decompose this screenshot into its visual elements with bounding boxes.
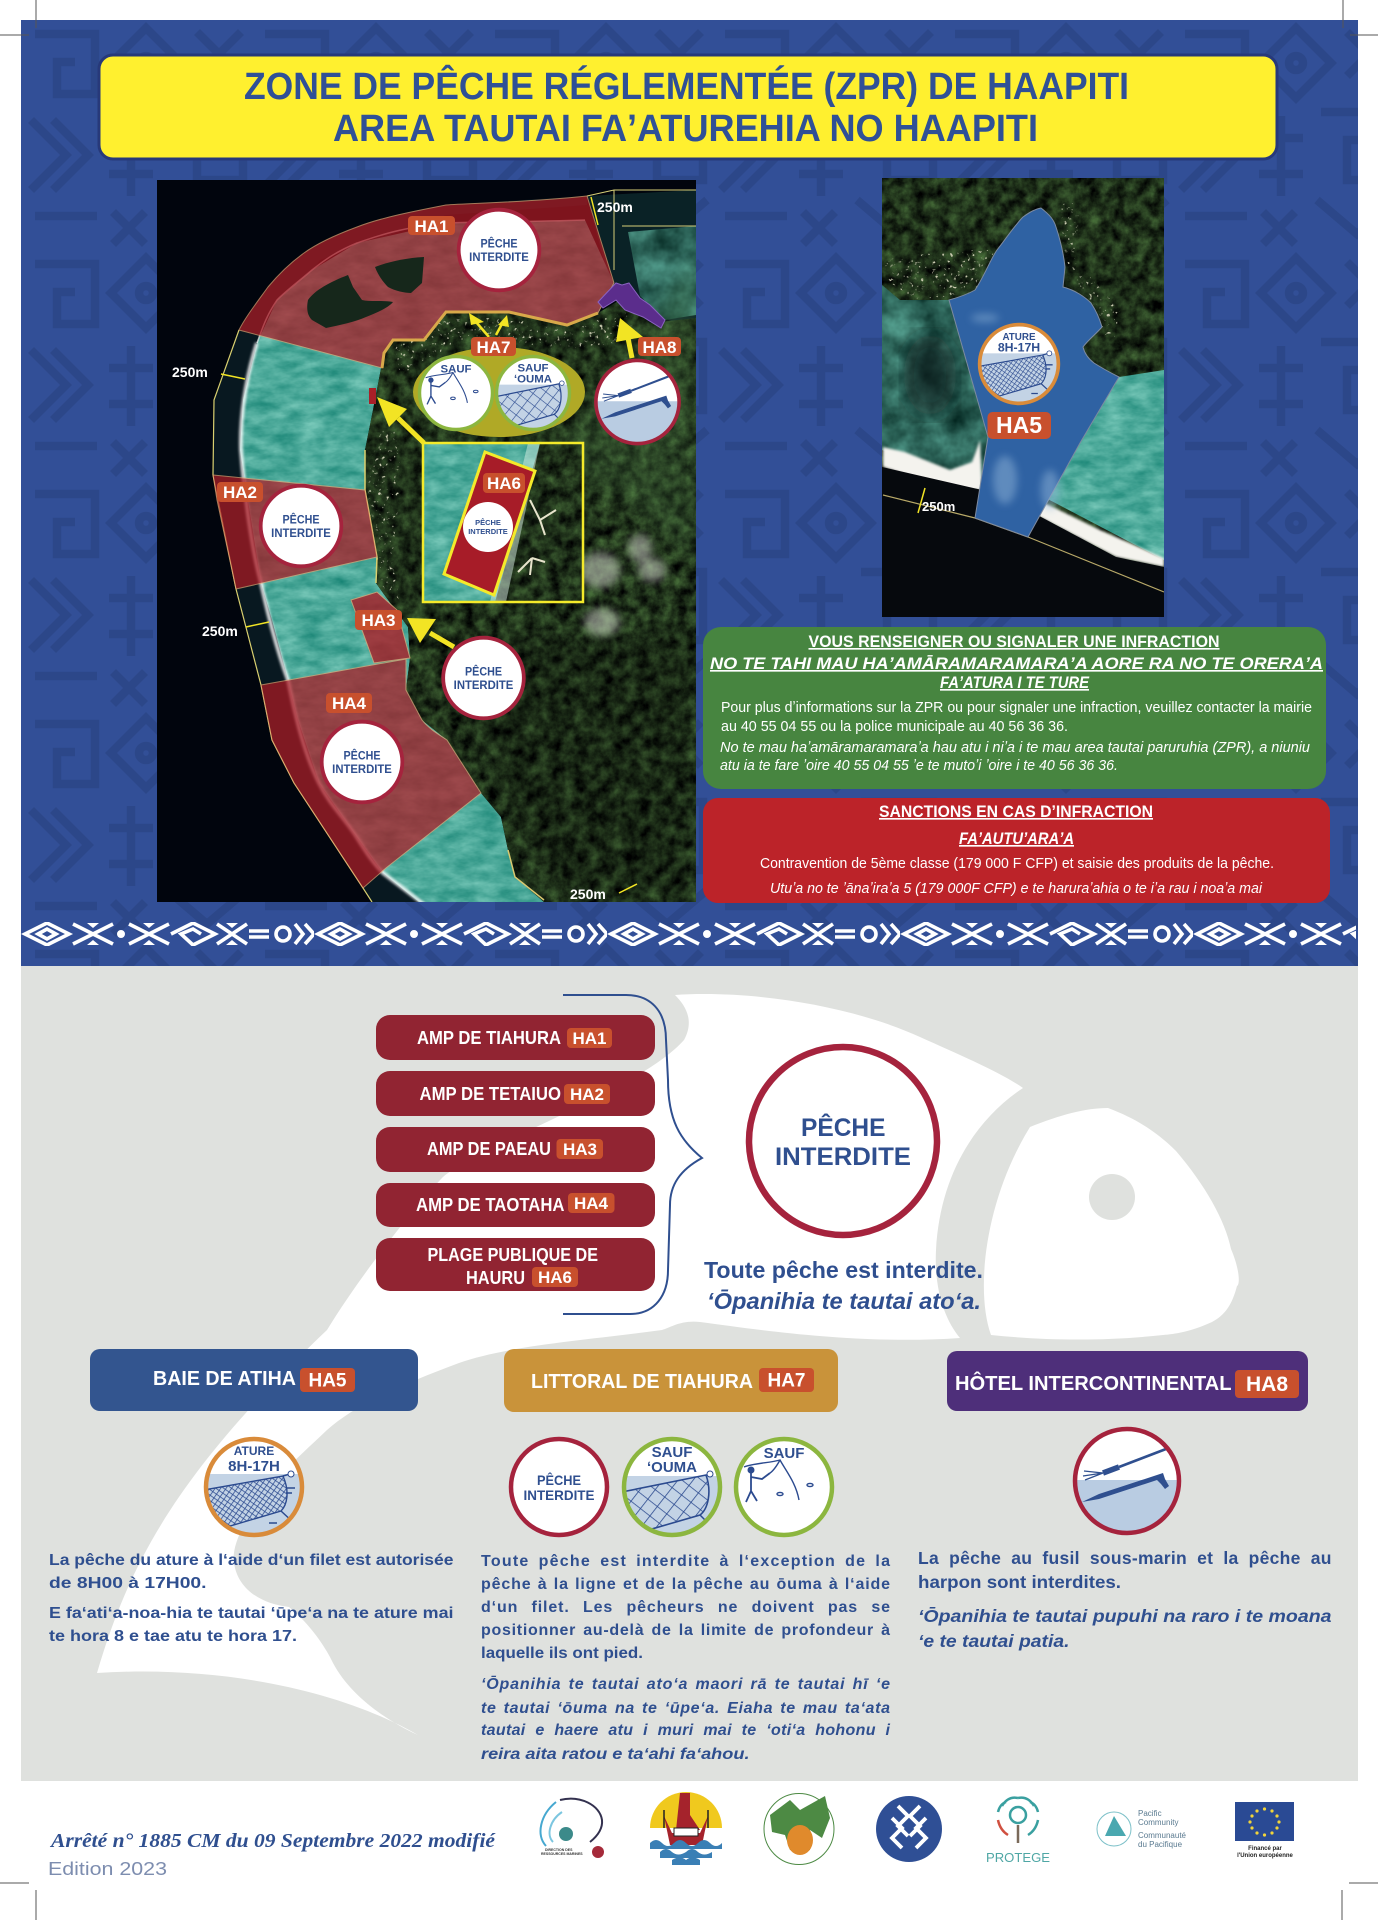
text: HA8 description: ʻe te tautai patia. [918,1631,1070,1651]
icon: ature 8H-17H: 8H-17H [228,1458,280,1475]
logo: PROTEGE: PROTEGE [986,1850,1050,1865]
logo: Union européenne: l'Union européenne [1237,1853,1294,1859]
icon: pêche interdite: INTERDITE [524,1487,594,1503]
list: AMP de Paeau: AMP DE PAEAU [427,1139,551,1159]
logo: direction des ressources marines: DIRECTION DES [545,1848,573,1852]
title banner [99,55,1277,159]
icon: big pêche interdite circle [749,1047,937,1235]
zone: HA3 [351,592,410,663]
label: HA1: HA1 [414,217,449,236]
header: Hôtel Intercontinental: HÔTEL INTERCONTINENTAL [955,1371,1232,1395]
panel: vous renseigner (green): NO TE TAHI MAU HAʼAMĀRAMARAMARAʼA AORE RA NO TE ORERAʼA [710,654,1323,673]
label: HA7: HA7 [476,338,511,357]
icon: pêche interdite HA4: PÊCHE [344,749,381,762]
panel: sanctions (red) [703,798,1330,903]
label: HA5 large [988,412,1051,439]
label: HA1 [408,216,455,236]
distance markers: 250m: 250m [597,199,633,215]
arrow: to HA8 [616,318,643,358]
logo: blue circle pattern [876,1796,942,1862]
list: Plage publique de Hauru: HAURU [466,1268,525,1288]
icon: ature 8H-17H [978,325,1060,407]
list: Plage publique de Hauru [376,1238,655,1291]
logo: Union européenne [1235,1802,1294,1859]
list: AMP de Tiahura: HA1 [572,1029,607,1048]
text: HA5 description: E faʻatiʻa-noa-hia te tautai ʻūpeʻa na te ature mai [49,1605,454,1622]
text: HA7 description: laquelle ils ont pied. [481,1645,643,1662]
icon: pêche interdite HA2 [261,486,341,566]
illustration: white fish silhouette [97,994,1239,1735]
header: Littoral de Tiahura: LITTORAL DE TIAHURA [531,1371,753,1393]
inset: HA6: INTERDITE [468,527,508,536]
zone: HA5 [949,208,1119,537]
text: toute pêche est interdite: ʻŌpanihia te tautai atoʻa. [707,1288,981,1314]
list: AMP de Tiahura: AMP DE TIAHURA [417,1028,561,1048]
text: HA7 description: pêche à la ligne et de la pêche au ōuma à lʻaide [481,1576,890,1593]
header: Baie de Atiha: BAIE DE ATIHA [153,1368,296,1390]
icon: pêche interdite HA4: INTERDITE [332,763,392,776]
distance markers: 250m: 250m [570,886,606,902]
icon: pêche interdite HA3: INTERDITE [454,679,513,692]
list: AMP de Tetaiuo [376,1071,655,1116]
icon: pêche interdite: PÊCHE [537,1471,581,1488]
text: HA8 description [918,1548,1332,1651]
icon: fusil sous-marin et harpon [1075,1429,1179,1533]
text: HA7 description: Toute pêche est interdite à lʻexception de la [481,1553,890,1570]
text: HA8 description: La pêche au fusil sous-marin et la pêche au [918,1548,1332,1568]
list: AMP de Taotaha [376,1183,655,1227]
list: AMP de Taotaha: AMP DE TAOTAHA [416,1195,564,1215]
brace [563,995,702,1314]
zone: HA2 [213,475,377,589]
distance marker: 250m [918,488,955,514]
panel: vous renseigner (green) [703,627,1326,789]
distance marker: 250m: 250m [922,499,955,514]
label: HA8: HA8 [642,338,677,357]
icon: sauf: SAUF [764,1445,804,1462]
zone: HA4 [261,659,481,888]
panel: vous renseigner (green): atu ia te fare ʼoire 40 55 04 55 ʼe te mutoʼi ʼoire i te 40 56 36 36. [720,757,1118,774]
icon: ature 8H-17H: 8H-17H [998,341,1040,355]
label: HA3: HA3 [361,611,396,630]
header: Littoral de Tiahura: HA7 [767,1370,806,1392]
label: HA5 large: HA5 [996,412,1042,438]
list: AMP de Paeau [376,1127,655,1172]
text: toute pêche est interdite [704,1257,983,1314]
inset: HA6: HA6 [487,474,521,493]
text: HA7 description: te tautai ʻōuma na te ʻūpeʻa. Eiaha te mau taʻata [481,1700,890,1717]
header: Baie de Atiha: HA5 [308,1370,347,1392]
footer: édition: Edition 2023 [48,1859,167,1879]
icon group: HA7 sauf et sauf ouma: SAUF [440,363,472,375]
label: HA4: HA4 [332,694,367,713]
logo: Polynésie française [650,1792,722,1865]
logo: Pacific Community: du Pacifique [1138,1840,1183,1849]
label: HA3 [355,610,402,630]
panel: vous renseigner (green): No te mau haʼamāramaramaraʼa hau atu i niʼa i te mau area tautai paruruhia (ZPR), a niuniu [720,739,1311,756]
icon group: HA7 sauf et sauf ouma: ʻOUMA [514,373,552,385]
icon: sauf [736,1439,832,1535]
arrow: to HA3 [407,618,454,647]
text: HA5 description [49,1552,454,1645]
icon: pêche interdite [511,1439,607,1535]
header: Hôtel Intercontinental [947,1351,1308,1411]
logo: PROTEGE [986,1798,1050,1865]
footer: arrêté: Arrêté n° 1885 CM du 09 Septembre 2022 modifié [49,1830,496,1852]
panel: gray legend section [21,966,1358,1781]
icon: big pêche interdite circle: PÊCHE [801,1112,886,1142]
title banner: AREA TAUTAI FAʼATUREHIA NO HAAPITI [333,108,1038,150]
text: HA7 description: tautai e haere atu i muri mai te ʻotiʻa hohonu i [481,1722,891,1739]
panel: vous renseigner (green): au 40 55 04 55 ou la police municipale au 40 56 36 36. [721,718,1068,735]
arrows: to HA7 coast [469,313,509,337]
list: AMP de Tetaiuo: AMP DE TETAIUO [420,1084,561,1104]
decorative band: tribal frieze [21,922,1356,946]
panel: vous renseigner (green): Pour plus dʼinformations sur la ZPR ou pour signaler une infraction, veuillez contacter la mairie [721,699,1312,716]
icon: ature 8H-17H: ATURE [234,1444,274,1458]
label: HA2: HA2 [223,483,257,502]
text: HA7 description: dʻun filet. Les pêcheurs ne doivent pas se [481,1599,890,1616]
panel: vous renseigner (green): VOUS RENSEIGNER OU SIGNALER UNE INFRACTION [808,633,1220,651]
icon: ature 8H-17H [204,1439,304,1540]
icon: pêche interdite HA4 [322,722,402,802]
text: HA8 description: harpon sont interdites. [918,1572,1121,1592]
icon: fusil HA8 [596,360,679,444]
list: Plage publique de Hauru: PLAGE PUBLIQUE DE [428,1245,598,1265]
satellite map: Baie de Atiha HA5 [882,178,1164,617]
zone: HA6 small marker [369,388,376,404]
icon group: HA7 sauf et sauf ouma [413,347,585,437]
distance markers: 250m [172,197,637,902]
icon: pêche interdite HA3 [443,638,524,718]
header: Baie de Atiha [90,1349,418,1411]
panel: sanctions (red): SANCTIONS EN CAS DʼINFRACTION [879,803,1153,821]
text: HA5 description: te hora 8 e tae atu te hora 17. [49,1628,297,1645]
logo: Pacific Community [1097,1809,1187,1849]
list: AMP de Paeau: HA3 [563,1140,597,1159]
text: HA5 description: La pêche du ature à lʻaide dʻun filet est autorisée [49,1552,454,1569]
logo: direction des ressources marines [541,1799,604,1858]
icon: ature 8H-17H: ATURE [1002,332,1036,343]
inset: HA6 [423,443,583,602]
panel: sanctions (red): FAʼAUTUʼARAʼA [959,830,1074,848]
logo: direction des ressources marines: RESSOURCES MARINES [541,1852,583,1856]
text: HA7 description: reira aita ratou e taʻahi faʻahou. [481,1746,750,1763]
icon: sauf ouma [622,1439,722,1542]
panel: vous renseigner (green): FAʼATURA I TE TURE [940,674,1090,692]
text: HA7 description: ʻŌpanihia te tautai atoʻa maori rā te tautai hī ʻe [481,1674,890,1693]
coast line: HA7 zone [382,312,598,368]
icon: sauf ouma: SAUF [652,1444,692,1461]
text: HA7 description [481,1553,891,1763]
text: HA5 description: de 8H00 à 17H00. [49,1575,206,1592]
distance markers: 250m: 250m [202,623,238,639]
logo: Union européenne: Financé par [1248,1846,1282,1852]
text: HA7 description: positionner au-delà de la limite de profondeur à [481,1622,890,1639]
icon: pêche interdite HA2: PÊCHE [283,513,320,526]
icon: big pêche interdite circle: INTERDITE [775,1143,911,1171]
text: HA8 description: ʻŌpanihia te tautai pupuhi na raro i te moana [918,1606,1332,1626]
inset: HA6: PÊCHE [475,518,501,527]
arrow: to HA6 [377,397,424,443]
panel: sanctions (red): Utuʼa no te ʼānaʼiraʼa 5 (179 000F CFP) e te haruraʼahia o te iʼa rau i noaʼa mai [770,880,1263,897]
list: AMP de Tiahura [376,1015,655,1060]
logo: commune de Moorea-Maiao [764,1794,834,1864]
logo: Pacific Community: Community [1138,1818,1178,1827]
list: Plage publique de Hauru: HA6 [538,1268,572,1287]
zone: HA1 [239,196,614,368]
list: AMP de Taotaha: HA4 [574,1194,609,1213]
distance markers: 250m: 250m [172,364,208,380]
zone: HA8 [598,283,665,328]
title banner: ZONE DE PÊCHE RÉGLEMENTÉE (ZPR) DE HAAPITI [244,64,1129,108]
icon: pêche interdite HA2: INTERDITE [271,527,331,540]
text: toute pêche est interdite: Toute pêche est interdite. [704,1257,983,1283]
panel: blue map section [21,20,1358,966]
logo: Pacific Community: Communauté [1138,1831,1187,1840]
icon: pêche interdite HA1: INTERDITE [469,251,529,264]
logo: Pacific Community: Pacific [1138,1809,1162,1818]
icon: sauf ouma: ʻOUMA [647,1459,697,1476]
icon group: HA7 sauf et sauf ouma: SAUF [517,363,549,375]
icon: pêche interdite HA1 [459,210,539,290]
list: AMP de Tetaiuo: HA2 [570,1085,604,1104]
header: Hôtel Intercontinental: HA8 [1246,1373,1288,1396]
header: Littoral de Tiahura [504,1349,838,1412]
panel: sanctions (red): Contravention de 5ème classe (179 000 F CFP) et saisie des produits de la pêche. [760,855,1274,872]
icon: fish eye [1089,1174,1135,1220]
icon: pêche interdite HA3: PÊCHE [465,665,502,678]
satellite map: Haapiti zones [157,180,696,905]
icon: pêche interdite HA1: PÊCHE [481,237,518,250]
